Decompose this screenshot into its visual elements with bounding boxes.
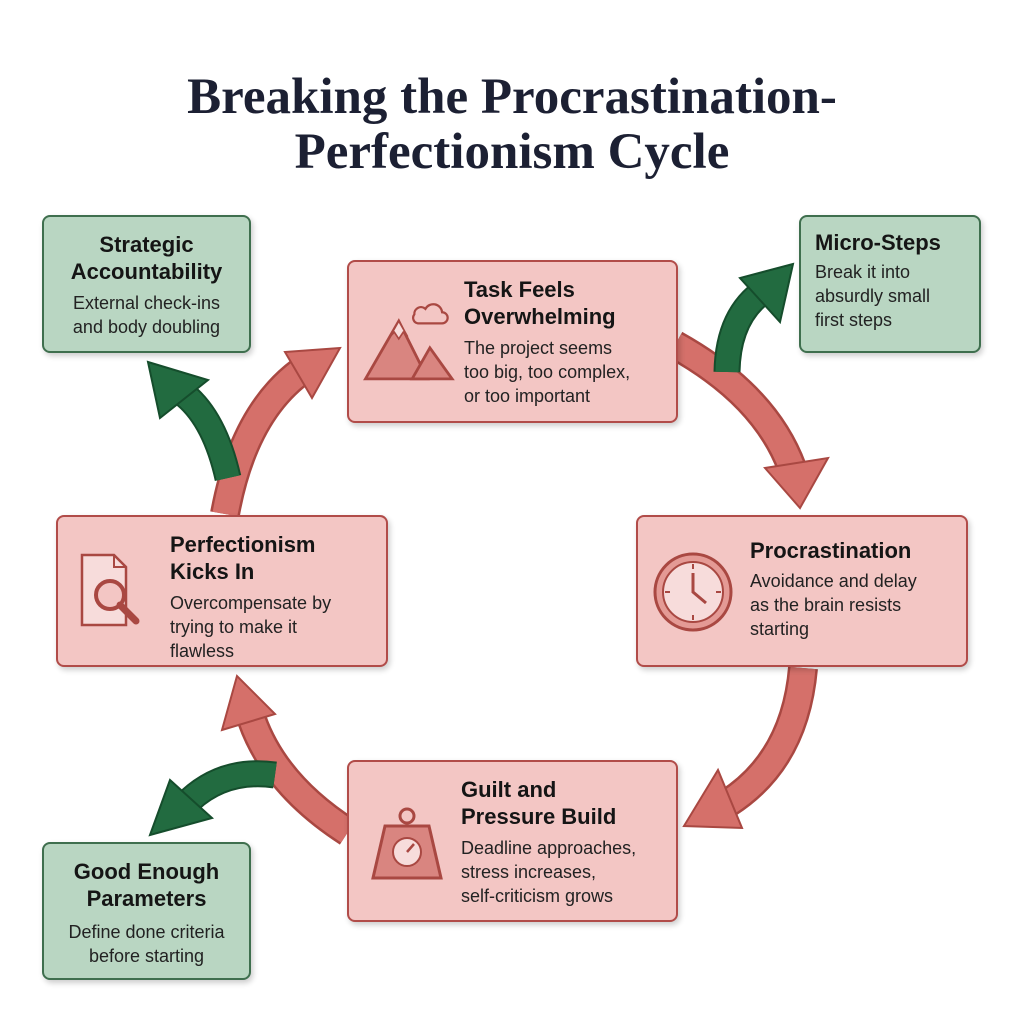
text: [750, 538, 917, 639]
icon: mountains: [363, 303, 455, 380]
panel: good enough parameters: Good Enough: [74, 859, 219, 884]
text: Perfectionism: [170, 532, 316, 557]
title: [187, 69, 837, 180]
text: Procrastination: [750, 538, 911, 563]
panel: strategic accountability: External check-ins: [73, 293, 220, 313]
title: Breaking the Procrastination-: [187, 69, 837, 125]
panel: micro-steps: Micro-Steps: [815, 230, 941, 255]
text: stress increases,: [461, 862, 596, 882]
text: Overcompensate by: [170, 593, 331, 613]
panel: task feels overwhelming: [347, 260, 678, 423]
text: trying to make it: [170, 617, 297, 637]
arrow: guilt to perfectionism: [222, 676, 348, 832]
panel: strategic accountability: Accountability: [71, 259, 222, 284]
panel: good enough parameters: Parameters: [87, 886, 206, 911]
panel: micro-steps: first steps: [815, 310, 892, 330]
text: Overwhelming: [464, 304, 616, 329]
text: too big, too complex,: [464, 362, 630, 382]
text: flawless: [170, 641, 234, 661]
green arrow: good enough: [150, 774, 275, 835]
panel: micro-steps: [799, 215, 981, 353]
text: Kicks In: [170, 559, 254, 584]
arrow: task to procrastination: [675, 345, 828, 508]
text: Deadline approaches,: [461, 838, 636, 858]
text: [464, 277, 630, 406]
text: [170, 532, 332, 661]
text: [461, 777, 636, 906]
text: self-criticism grows: [461, 886, 613, 906]
panel: guilt and pressure: [347, 760, 678, 922]
text: Guilt and: [461, 777, 556, 802]
panel: good enough parameters: before starting: [89, 946, 204, 966]
arrow: perfectionism to task: [225, 348, 340, 514]
title: Perfectionism Cycle: [295, 124, 729, 180]
text: The project seems: [464, 338, 612, 358]
text: Task Feels: [464, 277, 575, 302]
panel: strategic accountability: and body doubling: [73, 317, 220, 337]
text: as the brain resists: [750, 595, 901, 615]
arrow: procrastination to guilt: [684, 668, 803, 828]
text: Pressure Build: [461, 804, 616, 829]
icon: clock: [654, 552, 732, 632]
text: Avoidance and delay: [750, 571, 917, 591]
panel: micro-steps: absurdly small: [815, 286, 930, 306]
green arrow: accountability: [148, 362, 228, 478]
panel: good enough parameters: [42, 842, 251, 980]
text: starting: [750, 619, 809, 639]
green arrow: micro-steps: [727, 264, 793, 372]
text: or too important: [464, 386, 590, 406]
panel: good enough parameters: Define done criteria: [68, 922, 225, 942]
panel: perfectionism kicks in: [56, 515, 388, 667]
panel: procrastination: [636, 515, 968, 667]
panel: strategic accountability: [42, 215, 251, 353]
icon: weight: [371, 808, 443, 880]
icon: document magnifier: [80, 554, 140, 626]
panel: micro-steps: Break it into: [815, 262, 910, 282]
panel: strategic accountability: Strategic: [99, 232, 194, 257]
